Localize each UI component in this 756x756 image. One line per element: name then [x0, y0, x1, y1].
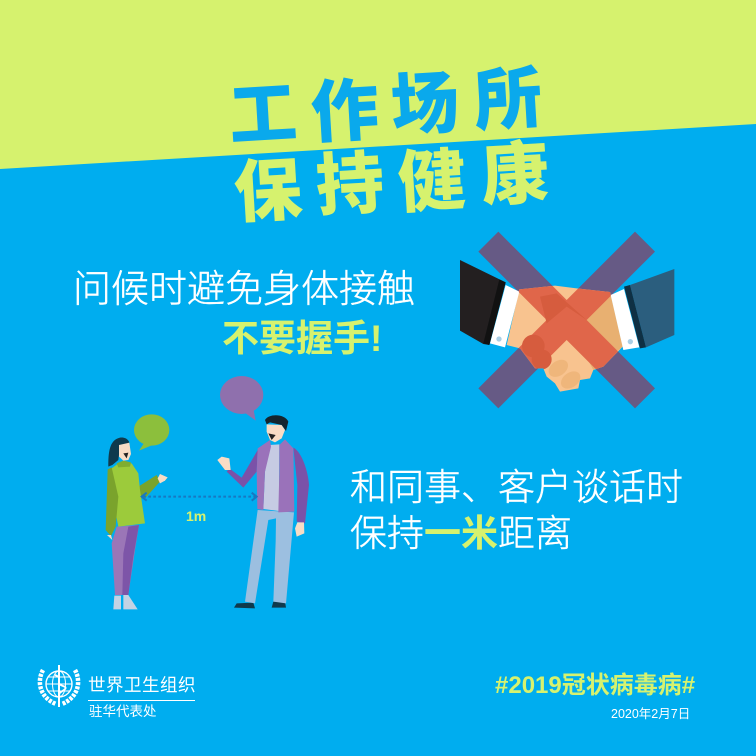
X overlay on hands	[518, 286, 618, 370]
left sleeve	[460, 260, 519, 347]
purple speech bubble	[220, 376, 263, 421]
illustration: woman	[106, 438, 168, 610]
hands	[507, 286, 623, 392]
title line 1: 工	[227, 75, 299, 155]
label: 1m: 1m	[186, 508, 206, 524]
title line 2: 健	[396, 142, 468, 222]
title line 1	[227, 60, 544, 155]
text: no handshake: 不要握手!	[222, 318, 382, 359]
title line 2: 保	[232, 152, 304, 232]
divider	[88, 700, 195, 701]
speech bubbles	[134, 376, 264, 451]
X bars	[478, 232, 655, 408]
icon: crossed-out handshake	[460, 232, 674, 408]
right sleeve	[611, 269, 674, 350]
title line 1: 所	[472, 60, 544, 140]
text: avoid contact: 问候时避免身体接触	[73, 269, 415, 311]
illustration: man	[217, 415, 309, 608]
title line 2: 康	[479, 135, 551, 215]
title line 1: 作	[309, 72, 381, 152]
distance arrow	[140, 492, 258, 502]
title line 2	[232, 135, 551, 232]
title line 1: 场	[389, 65, 461, 145]
WHO office: 驻华代表处	[89, 704, 156, 719]
text: distance line: 保持一米距离	[350, 513, 572, 554]
date: 2020年2月7日	[611, 707, 690, 721]
text: keep one metre: 和同事、客户谈话时	[350, 467, 683, 508]
title line 2: 持	[314, 145, 386, 225]
hashtag: #2019冠状病毒病#	[495, 672, 695, 699]
icon: WHO logo	[38, 665, 80, 707]
green speech bubble	[134, 414, 169, 451]
WHO name: 世界卫生组织	[88, 675, 196, 695]
